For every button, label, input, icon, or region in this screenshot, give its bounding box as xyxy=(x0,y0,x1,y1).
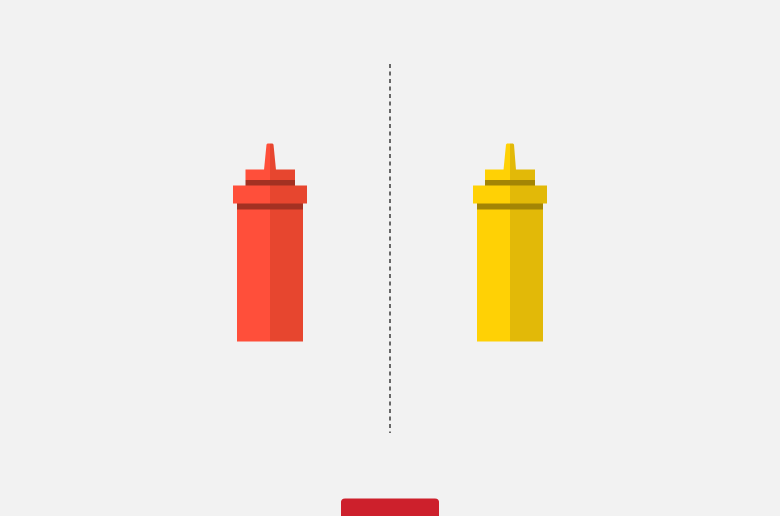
icon: ketchup bottle xyxy=(233,144,307,342)
red tab at bottom edge xyxy=(341,498,439,516)
dashed centre divider xyxy=(389,64,391,433)
icon: mustard bottle xyxy=(473,144,547,342)
